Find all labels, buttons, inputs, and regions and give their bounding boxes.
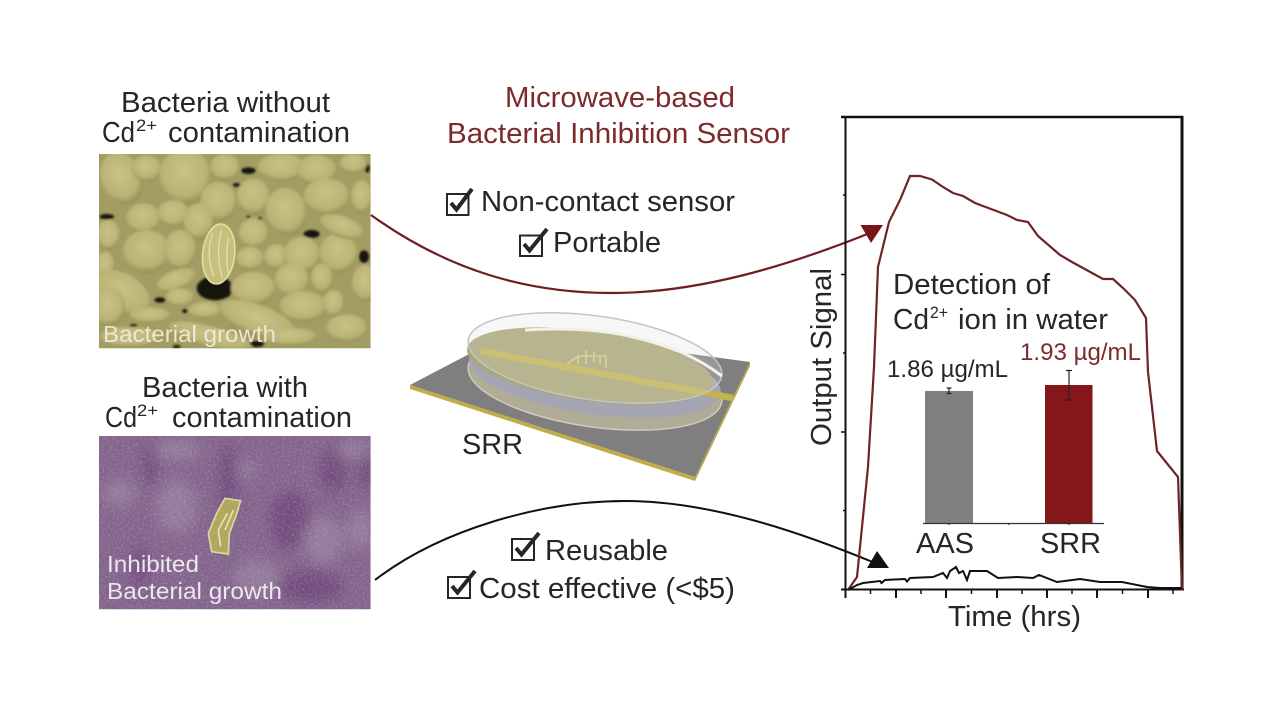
icon: checkbox cost effective: [448, 571, 475, 598]
error bars: [946, 370, 1072, 400]
photo: bacterial growth micrograph: [99, 154, 371, 348]
heading: bacteria without Cd2+: Bacteria without: [121, 87, 330, 119]
inset heading: detection of Cd2+ ion in water: 2+: [930, 303, 948, 322]
chart: output signal over time: [806, 116, 1184, 633]
title: Bacterial Inhibition Sensor: [447, 118, 791, 150]
feature list: reusable and cost effective: Reusable: [545, 535, 668, 567]
heading: bacteria without Cd2+: 2+: [136, 116, 157, 135]
caption: bacterial growth: Bacterial growth: [103, 321, 276, 347]
category: AAS: AAS: [916, 528, 974, 560]
heading: bacteria with Cd2+: 2+: [137, 401, 158, 420]
inset heading: detection of Cd2+ ion in water: [893, 269, 1109, 336]
heading: bacteria with Cd2+: [105, 372, 352, 434]
inset heading: detection of Cd2+ ion in water: Cd: [893, 304, 929, 336]
sensor plate: [410, 330, 750, 481]
heading: bacteria without Cd2+: contamination: [168, 117, 350, 149]
icon: checkbox reusable: [512, 533, 539, 560]
value: AAS: 1.86 µg/mL: [887, 356, 1008, 383]
inset bar chart: AAS vs SRR: [887, 339, 1141, 560]
feature list: reusable and cost effective: Cost effective (<$5): [479, 573, 735, 605]
petri dish: [462, 299, 733, 444]
heading: bacteria with Cd2+: Cd: [105, 402, 137, 434]
photo: inhibited bacterial growth micrograph: [99, 436, 375, 609]
icon: checkbox non-contact: [447, 189, 472, 215]
feature list: reusable and cost effective: [448, 533, 735, 605]
heading: bacteria with Cd2+: contamination: [172, 402, 352, 434]
inset heading: detection of Cd2+ ion in water: Detection of: [893, 269, 1050, 301]
axis label: time: Time (hrs): [948, 601, 1081, 633]
feature list: non-contact and portable: Non-contact sensor: [481, 186, 736, 218]
icon: central bacterium: [202, 223, 236, 285]
illustration: SRR sensor with petri dish: [410, 299, 750, 481]
icon: inhibited bacterium: [208, 498, 241, 554]
data line: without Cd2+: [848, 176, 1182, 590]
title: [447, 82, 791, 150]
feature list: non-contact and portable: Portable: [553, 227, 661, 259]
arrow: black curve to low signal: [375, 501, 889, 580]
inset axis: [923, 523, 1104, 525]
axis label: output signal: Output Signal: [806, 268, 838, 446]
arrow: red curve to high signal: [371, 215, 883, 293]
label: SRR: SRR: [462, 429, 523, 461]
category: SRR: SRR: [1040, 528, 1101, 560]
feature list: non-contact and portable: [447, 186, 736, 259]
heading: bacteria without Cd2+: [102, 87, 350, 149]
title: Microwave-based: [505, 82, 735, 114]
value: SRR: 1.93 µg/mL: [1020, 339, 1141, 366]
heading: bacteria without Cd2+: Cd: [102, 117, 135, 149]
caption: inhibited bacterial growth: Inhibited: [107, 551, 199, 577]
bar: SRR: [1045, 385, 1092, 523]
heading: bacteria with Cd2+: Bacteria with: [142, 372, 308, 404]
inset heading: detection of Cd2+ ion in water: ion in water: [958, 304, 1109, 336]
icon: checkbox portable: [520, 229, 547, 256]
caption: inhibited bacterial growth: [107, 551, 282, 604]
data line: with Cd2+: [848, 567, 1182, 590]
bar: AAS: [925, 391, 973, 523]
caption: inhibited bacterial growth: Bacterial growth: [107, 578, 282, 604]
chart axes and ticks: [841, 116, 1184, 598]
